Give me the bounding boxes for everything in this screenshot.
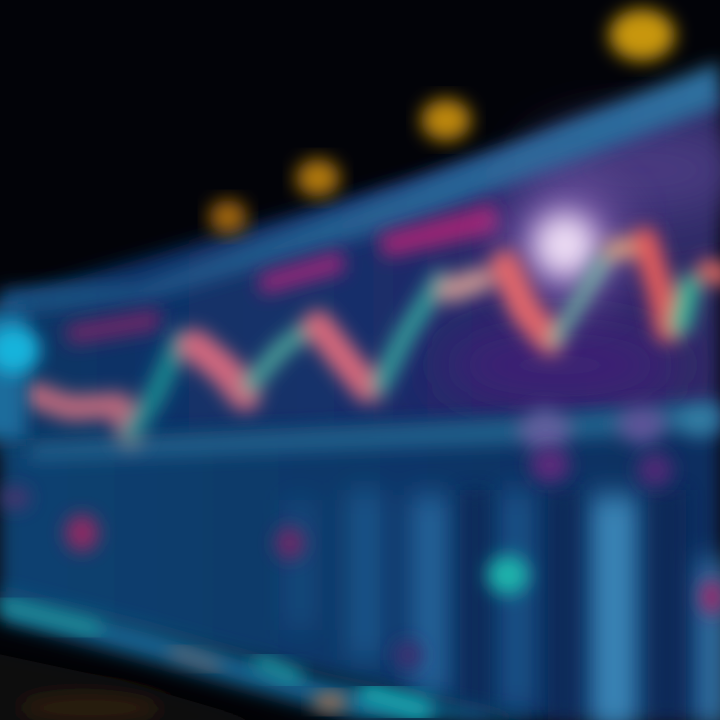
- glowing highlight: [507, 187, 623, 303]
- ceiling lights: [209, 9, 675, 234]
- light 4: [609, 9, 675, 61]
- dark floor corner: [0, 650, 290, 720]
- candlestick line chart: [35, 240, 720, 435]
- lower data panel with bars: [0, 410, 720, 720]
- data markers: [0, 447, 720, 669]
- magenta header bars: [65, 203, 500, 345]
- horizontal divider band: [30, 400, 720, 460]
- light 2: [296, 159, 340, 197]
- cyan glow at left edge: [0, 310, 40, 440]
- bottom ticker strip: [0, 590, 540, 720]
- bar columns: [288, 490, 720, 720]
- dark gaps between bars: [460, 490, 686, 720]
- light 3: [421, 99, 471, 141]
- light 1: [209, 200, 247, 234]
- upper chart screen: [0, 90, 720, 450]
- diagonal top frame beam: [0, 62, 720, 316]
